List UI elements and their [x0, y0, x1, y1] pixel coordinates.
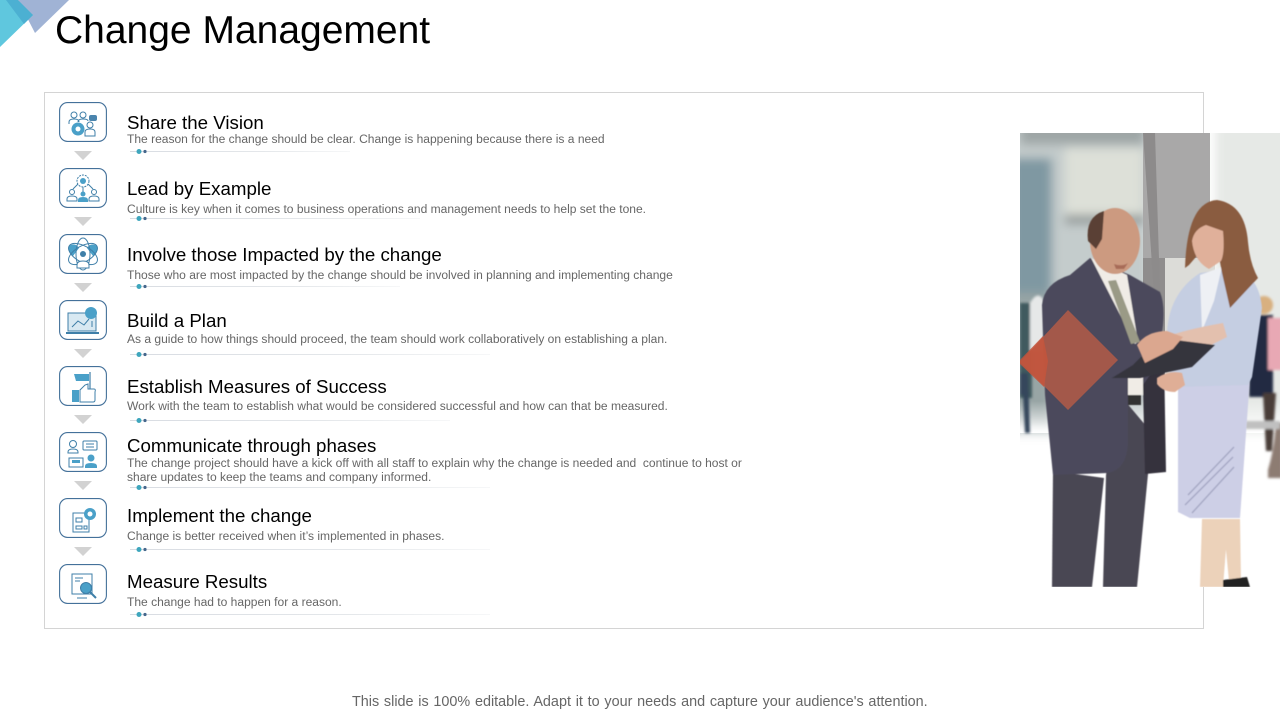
heading: Implement the change: [127, 505, 312, 526]
step 7: implement the change: [59, 498, 490, 552]
divider with dots: [130, 216, 420, 221]
face: [1192, 225, 1224, 269]
divider with dots: [130, 149, 350, 154]
heading: Share the Vision: [127, 112, 264, 133]
man: [1042, 208, 1166, 587]
icon: magnifier over report: [59, 564, 107, 604]
panel: change steps: [44, 92, 1204, 629]
description: Culture is key when it comes to business operations and management needs to help set the tone.: [127, 202, 646, 216]
divider with dots: [130, 418, 450, 423]
description: Change is better received when it’s implemented in phases.: [127, 529, 444, 543]
description: [127, 456, 742, 484]
background building: [1010, 123, 1280, 587]
icon: blueprint with gear: [59, 498, 107, 538]
footer note: This slide is 100% editable. Adapt it to your needs and capture your audience's attention.: [352, 694, 928, 710]
step 3: involve those impacted: [59, 234, 673, 289]
woman: [1164, 200, 1262, 587]
description: The change had to happen for a reason.: [127, 595, 342, 609]
title: Change Management: [55, 9, 430, 52]
divider with dots: [130, 284, 400, 289]
shirt: [1091, 258, 1138, 344]
description: As a guide to how things should proceed, the team should work collaboratively on establishing a plan.: [127, 332, 667, 346]
jacket: [1042, 258, 1164, 475]
divider with dots: [130, 547, 490, 552]
photo: two business people reviewing a folder: [1020, 133, 1280, 587]
jacket: [1164, 268, 1262, 387]
arrow down: [74, 349, 92, 358]
icon: people talking: [59, 432, 107, 472]
arrow down: [74, 151, 92, 160]
tie: [1108, 280, 1140, 344]
heading: Establish Measures of Success: [127, 376, 387, 397]
description: Work with the team to establish what would be considered successful and how can that be measured.: [127, 399, 668, 413]
arrow down: [74, 547, 92, 556]
skirt: [1178, 377, 1250, 518]
step 8: measure results: [59, 564, 490, 617]
description: The change project should have a kick off with all staff to explain why the change is needed and continue to host or: [127, 456, 742, 470]
description: The reason for the change should be clear. Change is happening because there is a need: [127, 132, 605, 146]
heading: Lead by Example: [127, 178, 271, 199]
arrow down: [74, 217, 92, 226]
step 1: share the vision: [59, 102, 605, 154]
legs: [1200, 519, 1241, 587]
icon: monitor with chart: [59, 300, 107, 340]
arrow down: [74, 415, 92, 424]
decorative corner triangles: [0, 0, 69, 47]
heading: Build a Plan: [127, 310, 227, 331]
description: share updates to keep the teams and company informed.: [127, 470, 431, 484]
divider with dots: [130, 612, 490, 617]
step 6: communicate through phases: [59, 432, 742, 490]
step 2: lead by example: [59, 168, 646, 221]
step 5: establish measures of success: [59, 366, 668, 423]
hair: [1185, 200, 1258, 308]
heading: Involve those Impacted by the change: [127, 244, 442, 265]
icon: leader with gear: [59, 168, 107, 208]
icon: team with gear: [59, 102, 107, 142]
folder and hands: [1112, 323, 1227, 392]
arrow down: [74, 481, 92, 490]
divider with dots: [130, 352, 490, 357]
red diamond overlay: [1020, 310, 1118, 410]
description: Those who are most impacted by the change should be involved in planning and implementing change: [127, 268, 673, 282]
divider with dots: [130, 485, 490, 490]
background people: [1020, 295, 1280, 478]
heading: Measure Results: [127, 571, 267, 592]
heading: Communicate through phases: [127, 435, 376, 456]
arrow down: [74, 283, 92, 292]
trousers: [1052, 471, 1104, 587]
icon: atom people: [59, 234, 107, 274]
step 4: build a plan: [59, 300, 667, 357]
head: [1090, 208, 1140, 274]
icon: thumbs up with flag: [59, 366, 107, 406]
